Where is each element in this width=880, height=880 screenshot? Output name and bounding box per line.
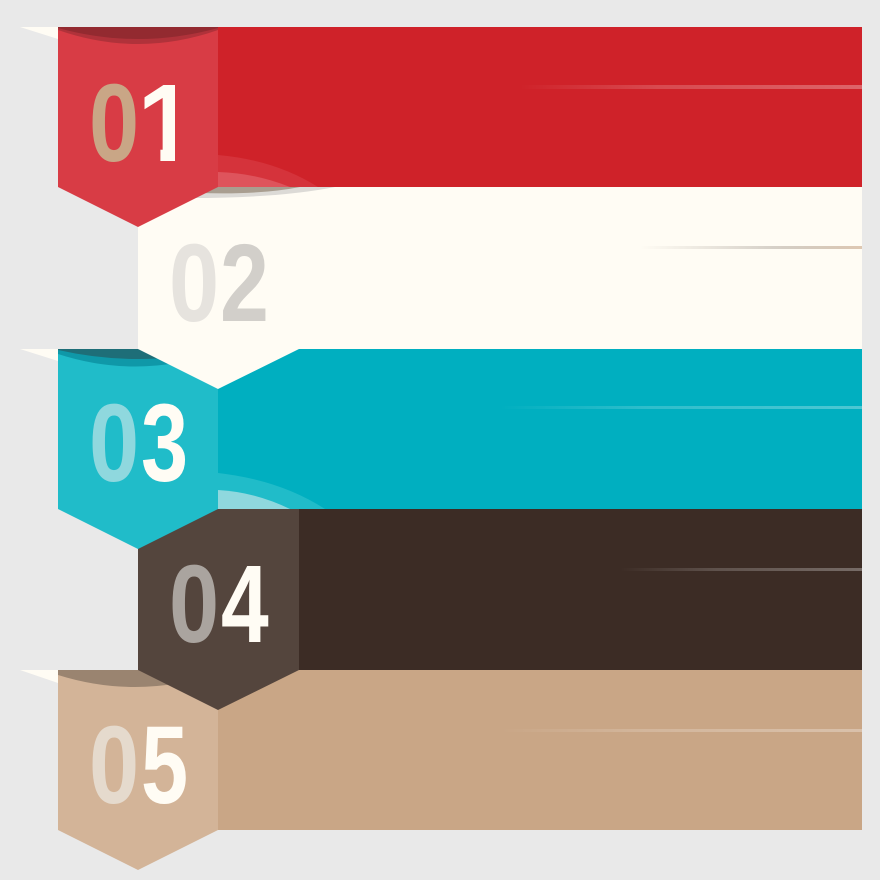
bar 5 [218,670,862,830]
ribbon 3: teal [20,349,862,549]
number 05: 0 [89,705,139,827]
badge shadow 5 [58,670,218,687]
badge shadow 3 [58,349,218,367]
badge 3 [58,349,218,549]
bar highlight 3 [218,473,325,509]
streak 4 [620,568,862,571]
number 03: 3 [141,381,188,505]
number 02 [169,223,269,345]
number 04: 4 [221,543,269,665]
streak 3 [500,406,862,409]
streak 1 [520,85,862,89]
number 02: 2 [220,223,269,345]
bar highlight 1 [218,155,318,187]
bar 1 [218,27,862,187]
bar 3 [218,349,862,509]
number 02: 0 [169,223,219,345]
badge 1 [58,27,218,227]
number 04: 0 [169,544,219,666]
bar 4 [299,509,862,670]
number 05 [89,703,188,827]
fold 5 [20,670,58,683]
ribbon 5: tan [20,670,862,870]
fold 3 [20,349,58,361]
number 03: 0 [89,383,139,505]
ribbon 1: red [20,27,862,227]
ribbon 4: dark brown [138,509,862,710]
number 03 [89,381,188,505]
number 01: 1 [137,62,198,185]
number 05: 5 [141,703,188,827]
number 01: 0 [89,63,139,185]
fold 1 [20,27,58,39]
streak 5 [500,729,862,732]
badge 4 [138,509,299,710]
bar and badge 2 [138,187,862,389]
ribbon 2: cream [138,187,862,389]
streak 2 [640,246,862,249]
badge 5 [58,670,218,870]
number 04 [169,543,269,666]
number 01 [92,84,175,162]
badge shadow 1 [58,27,218,44]
shadow under ribbon 1 [190,187,335,198]
